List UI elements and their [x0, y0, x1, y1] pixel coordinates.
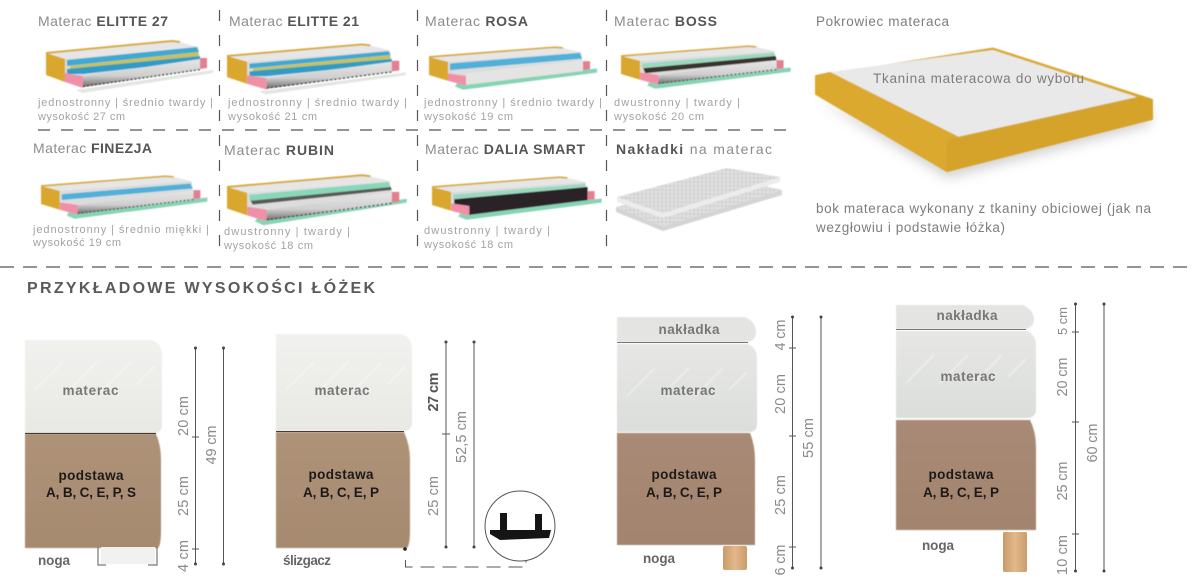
layer labels: nakładka [936, 308, 998, 323]
cover description: wezgłowiu i podstawie łóżka) [815, 220, 1005, 235]
dimension lines [426, 340, 476, 548]
layer labels: materac [660, 383, 716, 398]
title: Materac FINEZJA [33, 140, 152, 156]
description: wysokość 27 cm [37, 111, 125, 123]
title: Pokrowiec materaca [816, 14, 949, 29]
description: wysokość 18 cm [423, 239, 513, 251]
panel: mattress ELITTE 27 [37, 13, 213, 123]
mattress illustration [432, 177, 602, 220]
description: wysokość 21 cm [227, 111, 317, 123]
layer labels: podstawa [58, 468, 124, 483]
description: dwustronny | twardy | [424, 225, 550, 237]
dimension lines: 4 cm [176, 540, 192, 572]
layer labels: noga [922, 538, 954, 553]
description [613, 97, 740, 123]
dimension lines: 52,5 cm [454, 411, 470, 463]
panel: bed example 52,5 cm [276, 334, 555, 568]
dimension lines: 25 cm [176, 476, 192, 516]
mattress illustration [227, 44, 406, 94]
dimension lines: 10 cm [1055, 535, 1071, 575]
layer labels [38, 383, 136, 568]
mattress illustration [227, 175, 407, 225]
description: wysokość 19 cm [32, 237, 121, 249]
mattress illustration [621, 46, 791, 89]
panel: mattress ELITTE 21 [227, 13, 407, 123]
dimension lines: 20 cm [176, 396, 192, 436]
dimension lines [1055, 302, 1106, 575]
description: dwustronny | twardy | [224, 226, 350, 238]
description: jednostronny | średnio twardy | [227, 97, 407, 109]
dimension lines: 6 cm [773, 544, 789, 576]
description: wysokość 20 cm [613, 111, 704, 123]
title: Materac ELITTE 27 [38, 13, 168, 29]
dimension lines [176, 346, 225, 572]
dimension lines: 25 cm [1055, 462, 1071, 500]
layer labels: materac [314, 383, 370, 398]
callout: glider detail [403, 491, 555, 567]
description [423, 97, 602, 123]
dimension lines: 25 cm [426, 476, 442, 516]
title: Materac DALIA SMART [425, 141, 585, 157]
description: wysokość 19 cm [423, 111, 513, 123]
description [423, 225, 550, 251]
panel: mattress FINEZJA [32, 140, 209, 249]
cover description: bok materaca wykonany z tkaniny obiciowej (jak na [816, 201, 1151, 216]
dimension lines: 4 cm [773, 320, 789, 350]
layer labels: A, B, C, E, P, S [46, 485, 136, 500]
layer labels: podstawa [652, 467, 717, 482]
layer labels: podstawa [928, 467, 994, 482]
panel: mattress DALIA SMART [423, 141, 602, 251]
title: Nakładki na materac [616, 141, 772, 157]
layer labels: nakładka [658, 322, 720, 337]
mattress layer [25, 340, 162, 433]
description [37, 97, 213, 123]
layer labels: A, B, C, E, P [646, 485, 722, 500]
panel: mattress ROSA [423, 13, 602, 123]
panel: bed example 55 cm [617, 316, 822, 576]
panel: mattress BOSS [613, 13, 791, 123]
leg [1003, 532, 1027, 572]
description: jednostronny | średnio miękki | [32, 224, 209, 236]
base layer [25, 434, 161, 548]
dimension lines: 27 cm [426, 372, 442, 412]
mattress layer [896, 331, 1036, 418]
layer labels [283, 383, 379, 568]
topper layer [896, 305, 1034, 329]
title: Materac ROSA [425, 13, 528, 29]
description: dwustronny | twardy | [614, 97, 740, 109]
dimension lines: 55 cm [801, 418, 817, 458]
description: wysokość 18 cm [223, 240, 313, 252]
heading: PRZYKŁADOWE WYSOKOŚCI ŁÓŻEK [27, 278, 375, 297]
cover description [815, 201, 1151, 235]
layer labels: ślizgacz [283, 553, 331, 568]
panel: mattress toppers [616, 141, 782, 231]
fabric label: Tkanina materacowa do wyboru [873, 71, 1084, 86]
title: Materac BOSS [614, 13, 717, 29]
dimension lines: 20 cm [1055, 358, 1071, 396]
description: jednostronny | średnio twardy | [423, 97, 602, 109]
layer labels: materac [940, 369, 996, 384]
base layer [276, 432, 410, 548]
layer labels: podstawa [308, 467, 374, 482]
panel: bed example 49 cm [25, 340, 225, 572]
layer labels [643, 322, 722, 566]
dimension lines: 25 cm [773, 475, 789, 515]
mattress illustration [46, 41, 213, 93]
dimension lines: 20 cm [773, 374, 789, 414]
dimension lines: 5 cm [1055, 307, 1070, 335]
base layer [617, 433, 755, 545]
panel: bed example 60 cm [896, 302, 1106, 575]
title: Materac RUBIN [224, 142, 334, 158]
mattress layer [276, 334, 412, 431]
mattress illustration [429, 47, 597, 90]
layer labels: noga [38, 553, 70, 568]
leg [723, 546, 747, 570]
panel: mattress cover [815, 14, 1152, 235]
cover illustration [816, 49, 1152, 178]
description [223, 226, 350, 252]
dimension lines: 49 cm [204, 426, 220, 464]
layer labels: A, B, C, E, P [923, 485, 999, 500]
title: Materac ELITTE 21 [229, 13, 359, 29]
mattress illustration [41, 176, 207, 219]
topper layer [617, 317, 756, 342]
description [32, 224, 209, 249]
dimension lines: 60 cm [1085, 424, 1101, 462]
mattress layer [617, 344, 757, 432]
layer labels: A, B, C, E, P [303, 485, 379, 500]
base layer [896, 420, 1036, 530]
panel: mattress RUBIN [223, 142, 407, 252]
layer labels [922, 308, 999, 553]
description: jednostronny | średnio twardy | [37, 97, 213, 109]
layer labels: noga [643, 551, 675, 566]
topper illustration [616, 168, 782, 231]
description [227, 97, 407, 123]
layer labels: materac [62, 383, 119, 398]
leg [98, 547, 157, 565]
dimension lines [773, 316, 822, 576]
